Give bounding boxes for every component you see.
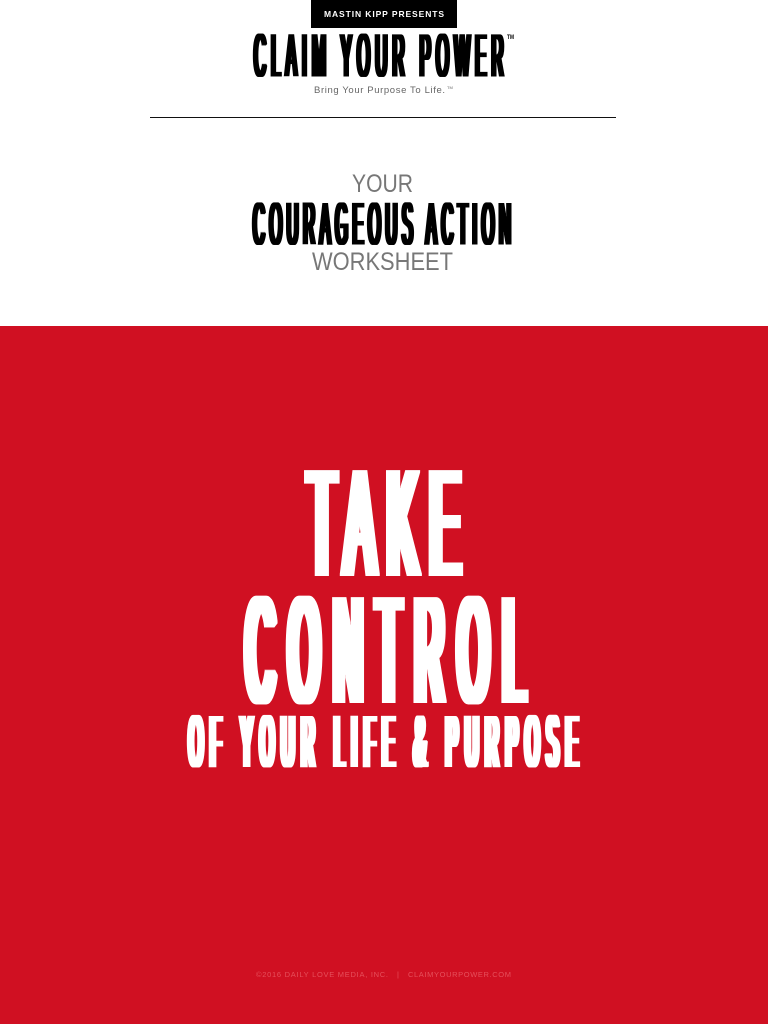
panel: red banner — [0, 326, 768, 1024]
headline: TAKE — [308, 438, 460, 608]
presenter tag: MASTIN KIPP PRESENTS — [324, 9, 444, 19]
worksheet heading: WORKSHEET — [312, 248, 453, 276]
brand tagline: Bring Your Purpose To Life. — [314, 85, 445, 96]
headline — [189, 438, 578, 784]
copyright footer: CLAIMYOURPOWER.COM — [408, 970, 511, 979]
header divider — [150, 117, 616, 118]
headline: OF YOUR LIFE & PURPOSE — [189, 701, 578, 784]
brand title: TM — [507, 35, 514, 41]
worksheet heading: YOUR — [352, 170, 413, 198]
copyright footer: | — [397, 970, 399, 979]
worksheet heading — [253, 170, 511, 276]
brand title: CLAIM YOUR POWER — [254, 23, 503, 90]
copyright footer: ©2016 DAILY LOVE MEDIA, INC. — [256, 970, 388, 979]
brand tagline: TM — [447, 85, 453, 90]
presenter tag — [311, 0, 457, 28]
headline: CONTROL — [246, 566, 525, 735]
copyright footer — [256, 970, 511, 979]
worksheet heading: COURAGEOUS ACTION — [253, 191, 511, 258]
